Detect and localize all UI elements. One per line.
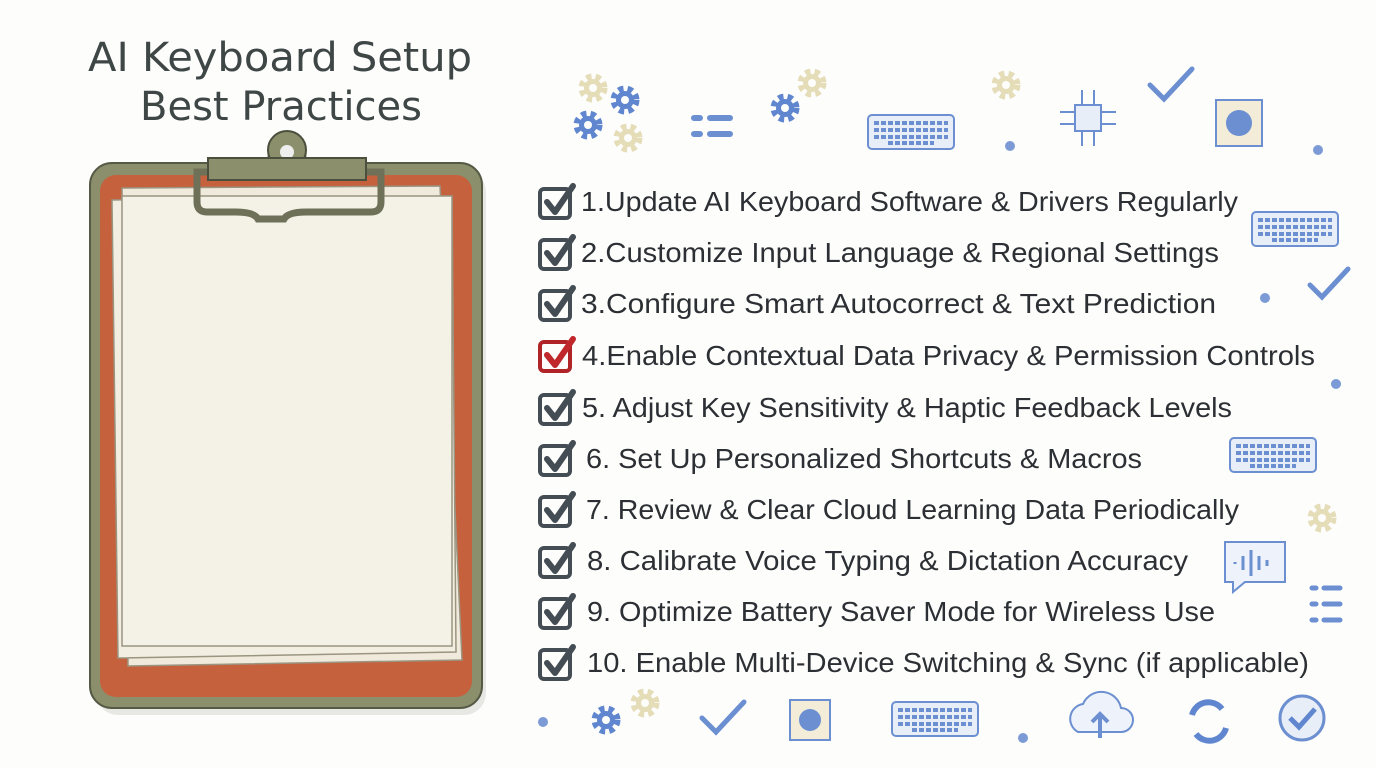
checklist: 6. Set Up Personalized Shortcuts & Macros xyxy=(586,443,1142,474)
checklist: 2.Customize Input Language & Regional Settings xyxy=(581,237,1219,268)
checklist xyxy=(540,186,1315,679)
right icons xyxy=(1225,212,1348,620)
top icons xyxy=(577,69,1323,155)
checklist: 4.Enable Contextual Data Privacy & Permission Controls xyxy=(582,340,1315,371)
bottom icons xyxy=(538,692,1324,743)
title xyxy=(88,35,472,130)
checklist: 5. Adjust Key Sensitivity & Haptic Feedback Levels xyxy=(582,392,1232,423)
checklist: 1.Update AI Keyboard Software & Drivers Regularly xyxy=(581,186,1238,217)
title: AI Keyboard Setup xyxy=(88,35,472,81)
clip xyxy=(197,131,381,219)
clipboard xyxy=(90,131,486,715)
checklist: 8. Calibrate Voice Typing & Dictation Accuracy xyxy=(587,545,1188,576)
checklist: 7. Review & Clear Cloud Learning Data Periodically xyxy=(586,494,1239,525)
checklist: 3.Configure Smart Autocorrect & Text Prediction xyxy=(581,288,1216,319)
checklist: 9. Optimize Battery Saver Mode for Wireless Use xyxy=(587,596,1215,627)
checklist: 10. Enable Multi-Device Switching & Sync (if applicable) xyxy=(587,647,1309,678)
title: Best Practices xyxy=(140,84,422,130)
